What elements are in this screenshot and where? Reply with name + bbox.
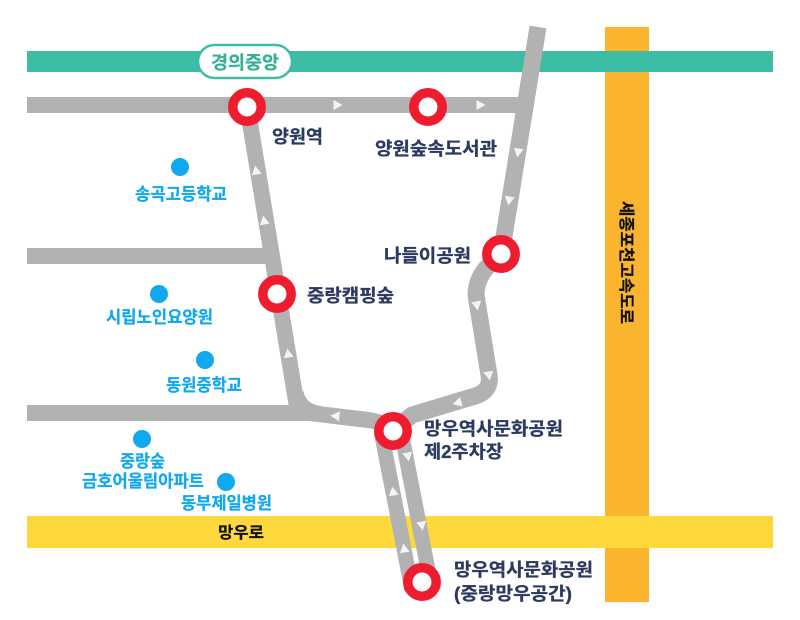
line badge: 경의중앙 xyxy=(198,45,292,78)
station labels: 제2주차장 xyxy=(424,442,503,462)
road network xyxy=(27,27,538,590)
station labels: 나들이공원 xyxy=(384,246,471,266)
landmark labels xyxy=(82,185,272,513)
station labels: 중랑캠핑숲 xyxy=(307,286,394,306)
station labels: 망우역사문화공원 xyxy=(454,560,593,580)
direction arrows xyxy=(250,100,524,553)
station labels: 양원역 xyxy=(272,127,323,147)
station markers xyxy=(233,93,515,596)
landmark labels: 중랑숲 xyxy=(120,452,165,471)
landmark labels: 금호어울림아파트 xyxy=(82,472,204,491)
line badge: 경의중앙: 경의중앙 xyxy=(211,53,279,73)
landmark labels: 동부제일병원 xyxy=(181,494,272,513)
expressway band: orange vertical xyxy=(605,27,649,602)
landmark labels: 시립노인요양원 xyxy=(106,308,213,327)
road band: yellow horizontal xyxy=(27,516,773,548)
landmark labels: 송곡고등학교 xyxy=(135,185,227,204)
station labels: 양원숲속도서관 xyxy=(375,139,497,159)
expressway label: 세종포천고속도로: 세종포천고속도로 xyxy=(617,201,635,324)
landmark labels: 동원중학교 xyxy=(166,376,242,395)
landmark dots xyxy=(133,158,235,491)
station labels: (중랑망우공간) xyxy=(454,584,572,604)
station labels xyxy=(272,127,593,604)
station labels: 망우역사문화공원 xyxy=(424,419,563,439)
railway band: green horizontal xyxy=(27,51,773,72)
road label: 망우로: 망우로 xyxy=(218,524,264,542)
